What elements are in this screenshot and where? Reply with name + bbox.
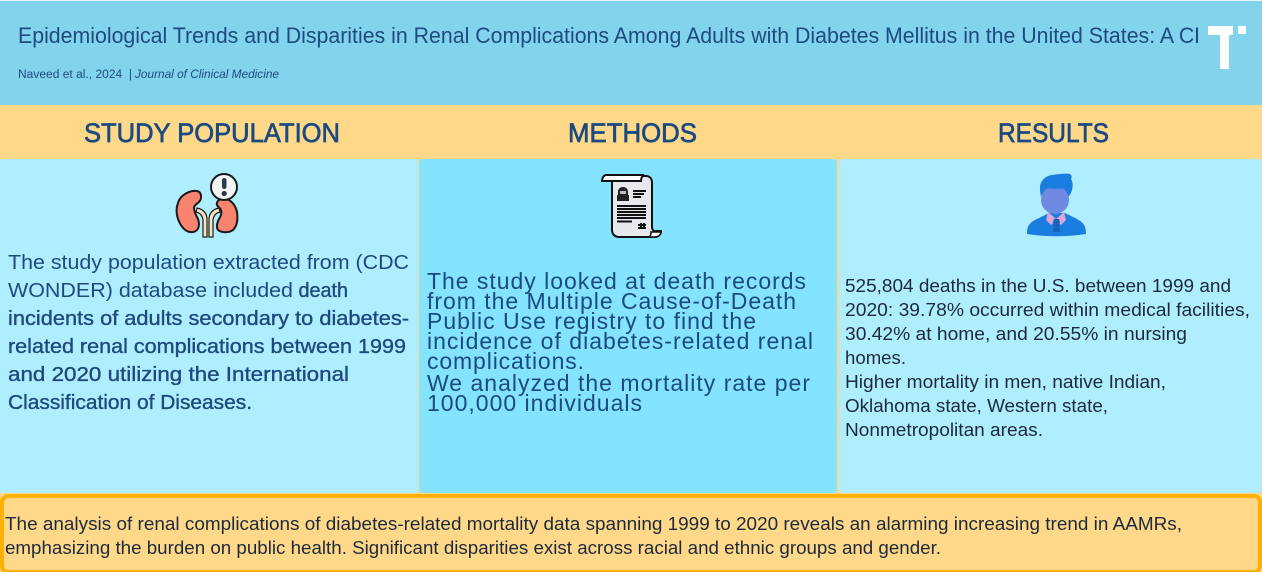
panel: methods [419,159,837,493]
text: results description: homes. [845,347,906,368]
text: methods description: from the Multiple Cause-of-Death [427,288,796,314]
icon: person [1027,174,1086,236]
text: results description: 2020: 39.78% occurred within medical facilities, [845,299,1250,320]
text: methods description: Public Use registry to find the [427,308,756,334]
conclusion text: The analysis of renal complications of diabetes-related mortality data spanning 1999 to 2020 reveals an alarming increasing trend in AAMRs, [5,513,1182,534]
panel: results [839,159,1262,493]
text: methods description: The study looked at death records [427,268,806,294]
text: results description: 525,804 deaths in the U.S. between 1999 and [845,275,1231,296]
text: methods description: 100,000 individuals [427,390,642,416]
text: methods description [427,268,813,416]
text: results description [845,275,1250,440]
panel: study population [0,159,418,493]
text: study population description: The study population extracted from (CDC [8,251,409,274]
citation: Journal of Clinical Medicine [134,69,279,81]
text: study population description: incidents of adults secondary to diabetes- [8,307,409,330]
icon: document scroll [602,175,661,237]
heading: methods: METHODS [568,118,697,148]
conclusion text [5,513,1182,558]
text: methods description: incidence of diabetes-related renal [427,328,813,354]
text: results description: Nonmetropolitan areas. [845,419,1043,440]
heading: study population: STUDY POPULATION [84,118,340,148]
conclusion box [2,496,1260,572]
text: study population description: death [293,279,348,302]
title: Epidemiological Trends and Disparities in Renal Complications Among Adults with Diabetes Mellitus in the United States: A CDC [18,23,1225,48]
section headings band [0,105,1262,159]
text: results description: Higher mortality in men, native Indian, [845,371,1166,392]
text: results description: Oklahoma state, Western state, [845,395,1108,416]
icon: kidneys with alert [176,174,237,237]
heading: results: RESULTS [998,118,1109,148]
logo [1208,26,1246,69]
citation: Naveed et al., 2024 | [18,69,132,81]
header banner [0,1,1262,105]
text: results description: 30.42% at home, and 20.55% in nursing [845,323,1187,344]
text: methods description: We analyzed the mortality rate per [427,370,810,396]
text: study population description [8,251,409,414]
citation [18,69,279,81]
text: study population description: related renal complications between 1999 [8,335,406,358]
text: methods description: complications. [427,348,584,374]
text: study population description: and 2020 utilizing the International [8,363,349,386]
conclusion text: emphasizing the burden on public health. Significant disparities exist across racial and ethnic groups and gender. [5,537,941,558]
text: study population description: Classification of Diseases. [8,391,252,414]
text: study population description: WONDER) database included [8,279,293,302]
